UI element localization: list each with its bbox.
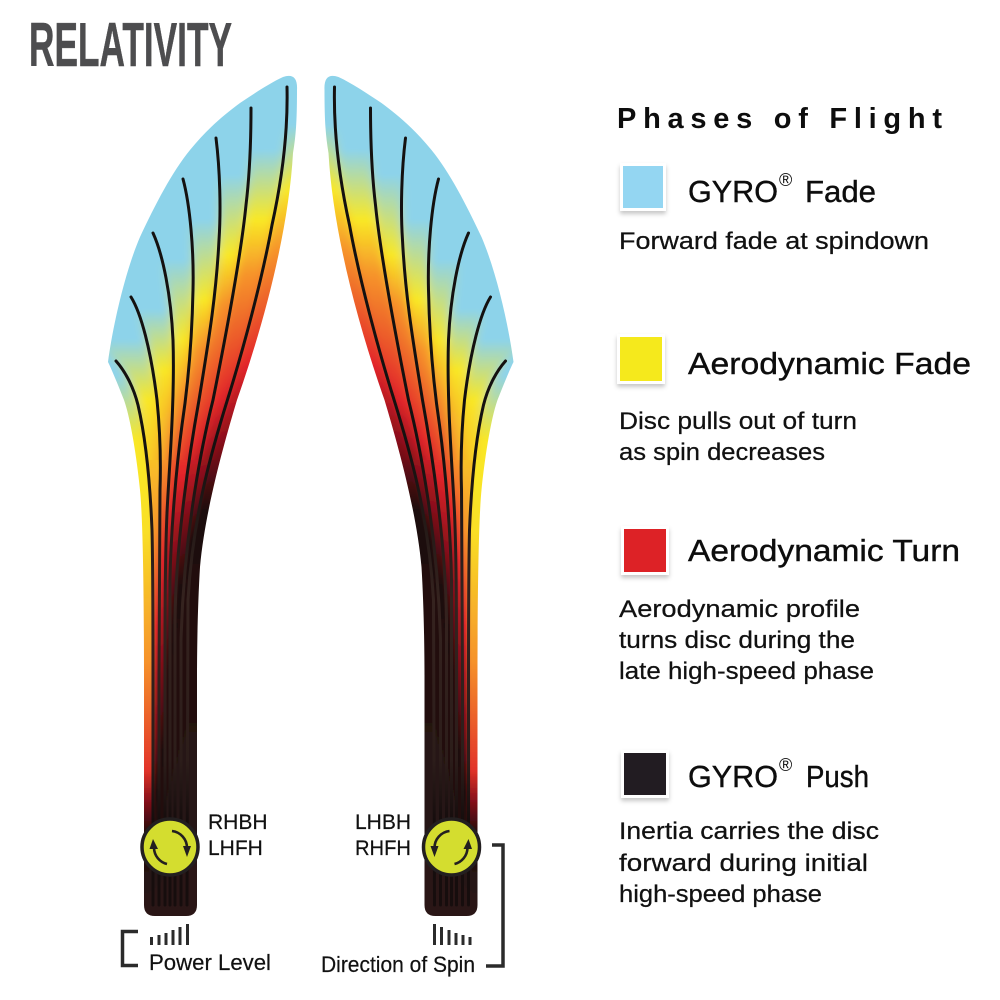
description: turns disc during the xyxy=(619,627,855,654)
label: LHBH RHFH xyxy=(355,811,411,860)
heading: GYRO Fade: Fade xyxy=(805,174,876,209)
heading: GYRO Fade: GYRO xyxy=(688,174,778,209)
label: LHBH RHFH: LHBH xyxy=(355,811,411,834)
title: RELATIVITY xyxy=(29,11,232,80)
description: late high-speed phase xyxy=(619,658,874,685)
swatch: yellow xyxy=(618,336,664,382)
heading: GYRO Push: ® xyxy=(779,755,792,775)
flight chart: left wing xyxy=(40,0,410,930)
description: Aerodynamic profile xyxy=(619,596,860,623)
description xyxy=(619,596,874,685)
label: LHBH RHFH: RHFH xyxy=(355,837,411,860)
swatch: black xyxy=(622,752,668,796)
label: direction of spin: Direction of Spin xyxy=(321,952,475,977)
heading: GYRO Push: GYRO xyxy=(688,759,778,794)
description: Disc pulls out of turn xyxy=(619,408,857,435)
legend item: GYRO Push xyxy=(619,752,879,908)
description: Forward fade at spindown xyxy=(619,228,929,255)
heading: GYRO Fade xyxy=(688,170,876,209)
bracket: direction of spin xyxy=(486,845,503,966)
heading: GYRO Push: Push xyxy=(806,759,869,794)
legend item: Aerodynamic Fade xyxy=(618,336,971,466)
label: RHBH LHFH xyxy=(208,811,268,860)
heading: GYRO Push xyxy=(688,755,869,794)
legend item: Aerodynamic Turn xyxy=(619,528,960,685)
flight chart: right wing xyxy=(212,0,582,930)
heading: phases of flight: Phases of Flight xyxy=(617,103,942,135)
icon: spin direction disc xyxy=(142,819,198,875)
bracket: power level xyxy=(122,932,138,966)
label: power level: Power Level xyxy=(149,950,271,975)
description xyxy=(619,818,879,908)
heading: Aerodynamic Turn: Aerodynamic Turn xyxy=(688,533,960,568)
heading: Aerodynamic Fade: Aerodynamic Fade xyxy=(688,346,971,381)
swatch: blue xyxy=(622,164,664,210)
label: RHBH LHFH: LHFH xyxy=(208,837,263,860)
description: as spin decreases xyxy=(619,439,825,466)
description: Inertia carries the disc xyxy=(619,818,879,845)
icon: power level bars xyxy=(150,924,189,945)
description xyxy=(619,408,857,466)
legend item: GYRO Fade xyxy=(619,164,929,255)
description: high-speed phase xyxy=(619,881,822,908)
description: forward during initial xyxy=(619,850,868,877)
gradient fill of wing xyxy=(40,0,410,930)
swatch: red xyxy=(622,528,668,574)
trajectory lines xyxy=(116,87,287,905)
icon: direction of spin bars xyxy=(433,924,472,945)
heading: GYRO Fade: ® xyxy=(779,170,792,190)
label: RHBH LHFH: RHBH xyxy=(208,811,268,834)
